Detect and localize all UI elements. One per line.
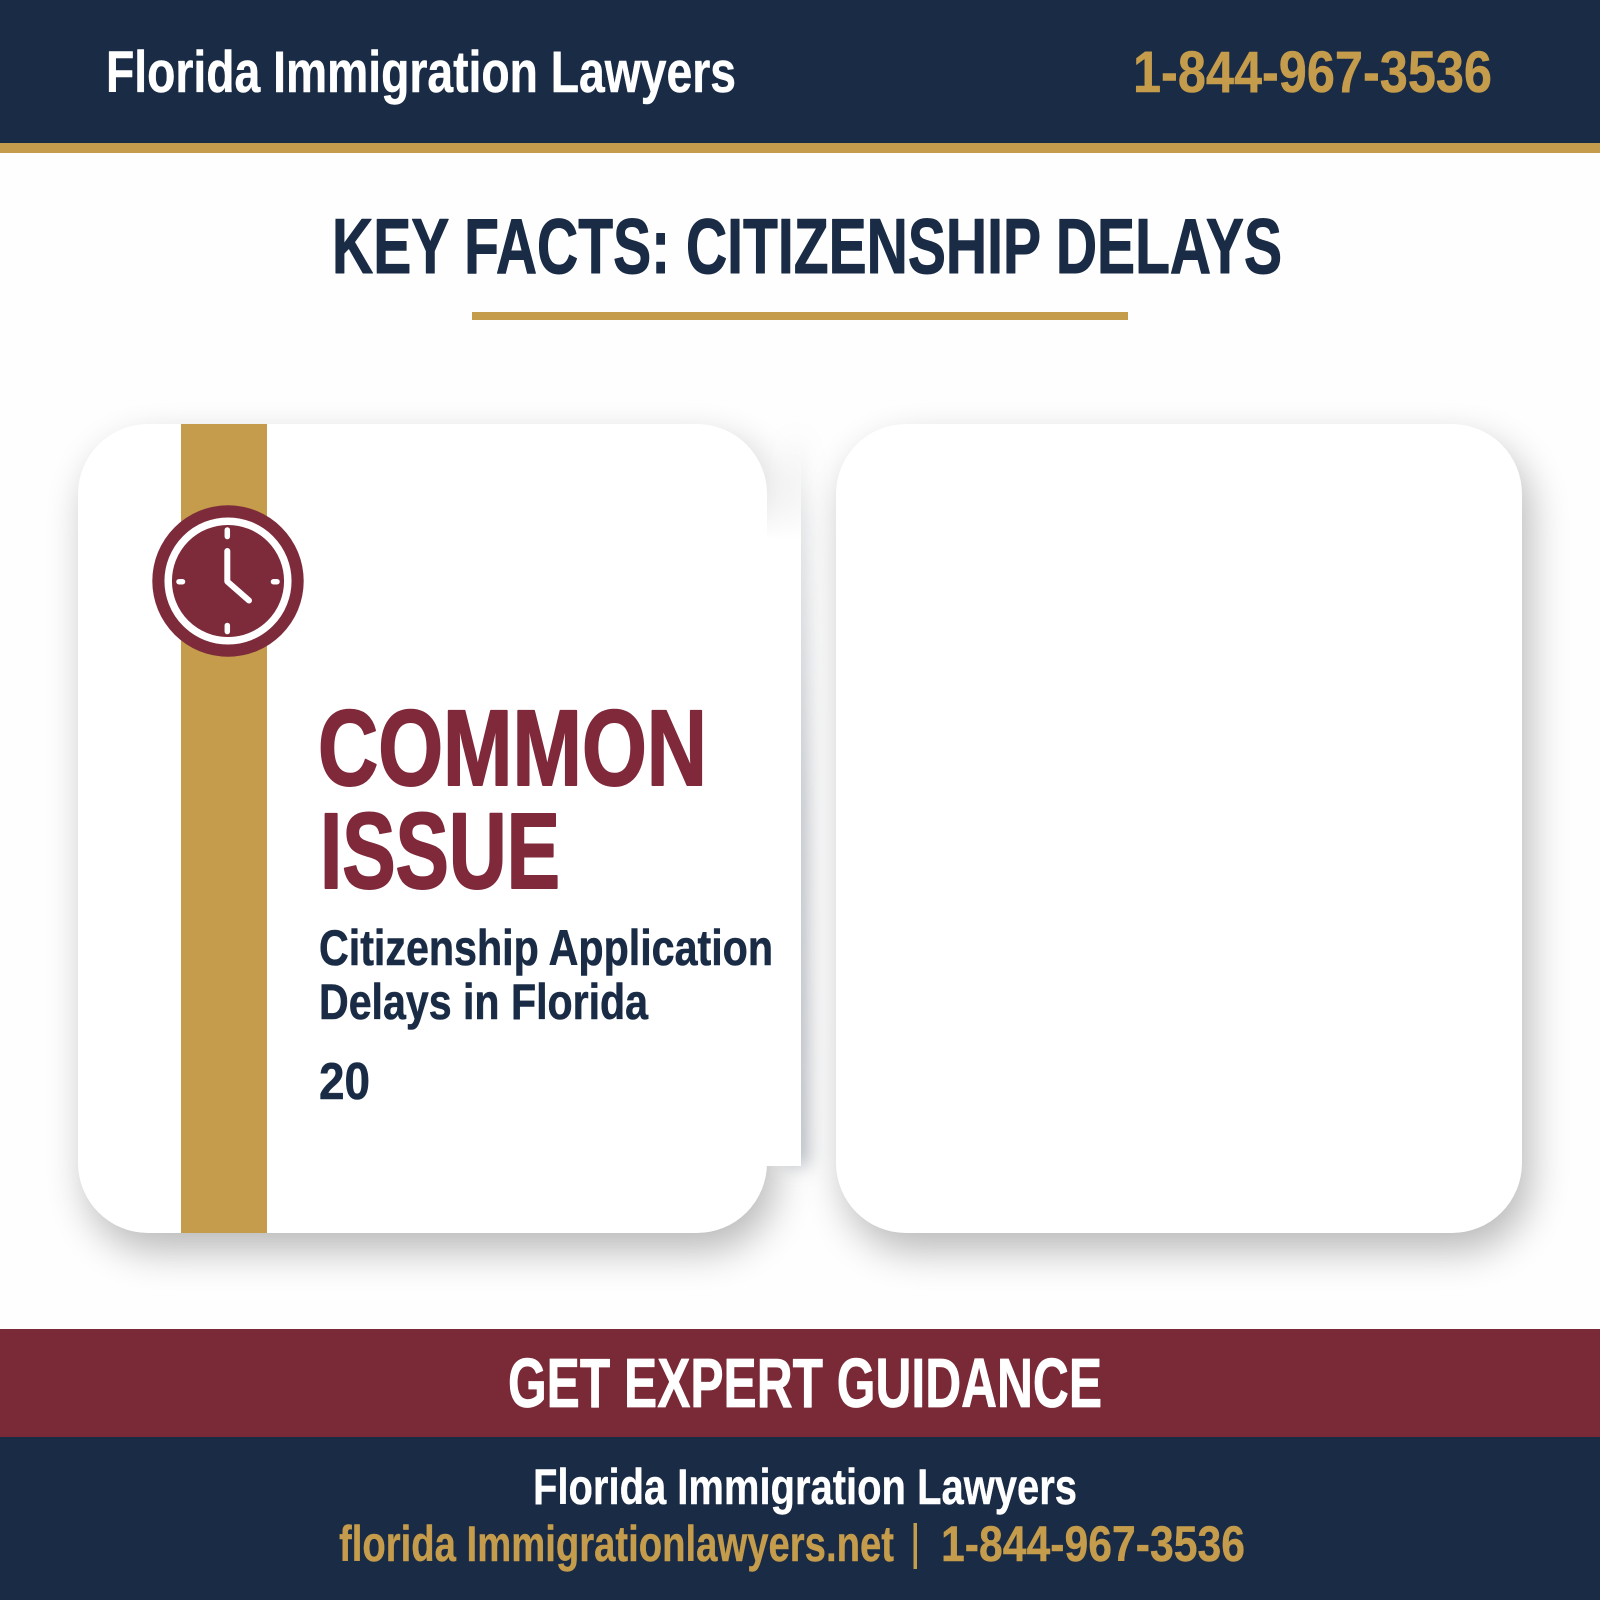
footer phone number: 1-844-967-3536 bbox=[941, 1516, 1245, 1572]
panel: empty right card bbox=[836, 424, 1530, 1251]
footer divider pipe bbox=[914, 1523, 917, 1569]
card back sheet bbox=[735, 430, 809, 1166]
card heading: ISSUE bbox=[320, 790, 560, 911]
card description: Citizenship Application bbox=[319, 920, 773, 976]
panel: common issue card bbox=[78, 424, 809, 1251]
call to action band bbox=[0, 1329, 1600, 1437]
header firm name: Florida Immigration Lawyers bbox=[106, 40, 736, 105]
header phone number: 1-844-967-3536 bbox=[1133, 40, 1492, 105]
title: KEY FACTS: CITIZENSHIP DELAYS bbox=[332, 202, 1282, 290]
card number: 20 bbox=[319, 1053, 370, 1111]
header bar bbox=[0, 0, 1600, 153]
footer website: florida Immigrationlawyers.net bbox=[339, 1516, 894, 1572]
icon: clock bbox=[152, 505, 304, 657]
card heading bbox=[318, 687, 707, 911]
footer bbox=[0, 1437, 1600, 1600]
call to action band: GET EXPERT GUIDANCE bbox=[508, 1344, 1102, 1422]
card description bbox=[319, 920, 773, 1030]
footer firm name: Florida Immigration Lawyers bbox=[533, 1459, 1077, 1515]
card description: Delays in Florida bbox=[319, 974, 649, 1030]
gold stripe bbox=[181, 424, 267, 1233]
card heading: COMMON bbox=[318, 687, 707, 808]
title underline bbox=[472, 312, 1128, 320]
